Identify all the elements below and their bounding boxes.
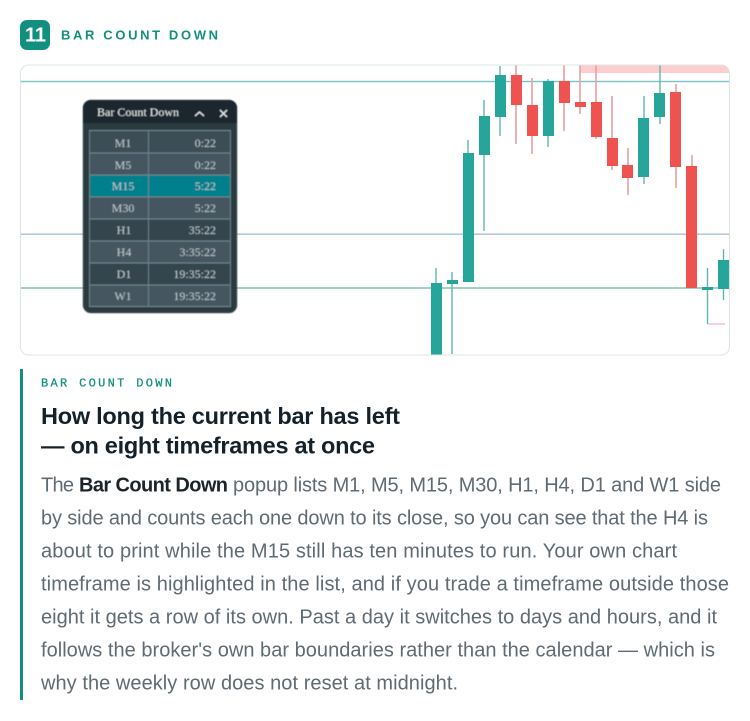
popup panel: bar count down: [83, 100, 237, 313]
timeframe table: 0:22: [195, 158, 216, 172]
timeframe table: [90, 130, 230, 306]
timeframe table: 3:35:22: [179, 245, 216, 259]
timeframe table: 5:22: [195, 201, 216, 215]
description text: Bar Count Down: [79, 474, 228, 496]
popup title bar: Bar Count Down: [97, 105, 179, 119]
timeframe table: W1: [114, 289, 132, 303]
description text: follows the broker's own bar boundaries rather than the calendar — which is: [41, 640, 715, 662]
panel title: [41, 403, 400, 458]
description text: timeframe is highlighted in the list, and if you trade a timeframe outside those: [41, 574, 729, 596]
timeframe table: 19:35:22: [173, 289, 216, 303]
timeframe table: M1: [115, 136, 131, 150]
description text: The: [41, 474, 74, 496]
timeframe table: D1: [117, 267, 131, 281]
accent bar: [20, 369, 23, 700]
section number badge: 11: [25, 24, 46, 46]
candlesticks: [431, 65, 729, 355]
panel title: How long the current bar has left: [41, 403, 400, 429]
timeframe table: 35:22: [189, 223, 216, 237]
horizontal price levels: [21, 81, 730, 289]
description text: by side and counts each one down to its close, so you can see that the H4 is: [41, 508, 708, 530]
description text: eight it gets a row of its own. Past a day it switches to days and hours, and it: [41, 606, 717, 628]
timeframe table: H1: [117, 223, 131, 237]
timeframe table: M15: [112, 179, 134, 193]
timeframe table: 0:22: [195, 136, 216, 150]
description text: about to print while the M15 still has ten minutes to run. Your own chart: [41, 540, 677, 562]
description text: [40, 474, 729, 694]
supply zone band: [580, 65, 730, 73]
timeframe table: M5: [115, 158, 131, 172]
panel title: — on eight timeframes at once: [41, 432, 375, 458]
chart screenshot card: [20, 65, 730, 355]
timeframe table: 19:35:22: [173, 267, 216, 281]
timeframe table: M30: [112, 201, 134, 215]
popup title bar: [83, 100, 237, 123]
timeframe table: H4: [117, 245, 131, 259]
section heading: BAR COUNT DOWN: [61, 28, 218, 42]
timeframe table: 5:22: [195, 179, 216, 193]
eyebrow label: BAR COUNT DOWN: [41, 377, 172, 391]
section number badge: [20, 20, 50, 50]
description text: why the weekly row does not reset at midnight.: [40, 672, 458, 694]
description text: popup lists M1, M5, M15, M30, H1, H4, D1 and W1 side: [233, 474, 721, 496]
